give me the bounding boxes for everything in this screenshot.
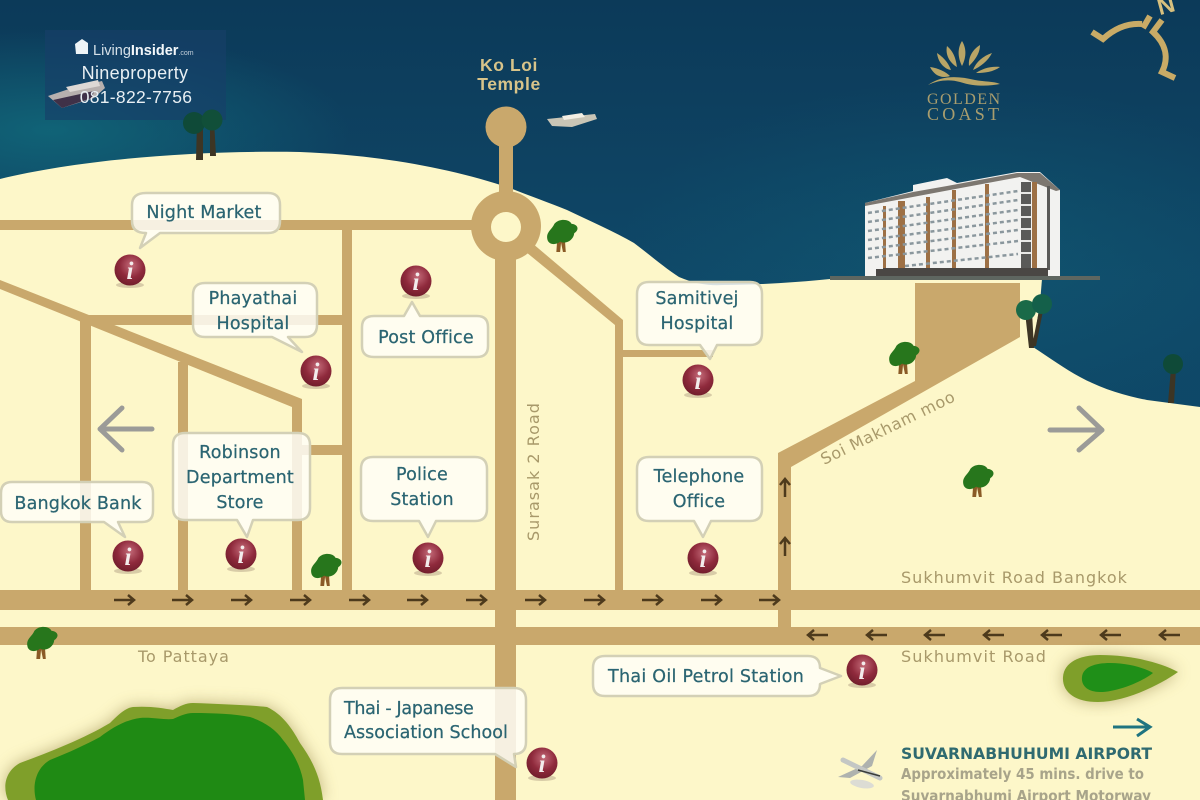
navigation arrow right: [1050, 408, 1102, 450]
callout: Robinson Department Store: Robinson: [199, 443, 281, 463]
callout: Phayathai Hospital: Phayathai: [209, 289, 297, 309]
Sukhumvit Road carriageway: [0, 627, 1200, 645]
road labels: [137, 387, 1128, 666]
golf course small: [1063, 655, 1178, 702]
callout: Night Market: Night Market: [146, 203, 262, 223]
Samitivej link road: [623, 350, 713, 357]
palm on shore: [1016, 294, 1052, 348]
icon: airplane: [838, 750, 880, 790]
callout: Telephone Office: [637, 457, 762, 537]
callout: Samitivej Hospital: Samitivej: [655, 289, 739, 309]
phone number: 081-822-7756: [80, 87, 192, 107]
tree at Sukhumvit: [311, 554, 342, 586]
compass: [1092, 0, 1178, 78]
callout: Samitivej Hospital: Hospital: [660, 314, 734, 334]
building: [830, 172, 1100, 280]
navigation arrow left: [100, 408, 152, 450]
callout: Police Station: Station: [390, 490, 454, 510]
window rows: [868, 191, 1018, 266]
LivingInsider wordmark: LivingInsider.com: [93, 43, 194, 59]
info markers: [112, 254, 878, 781]
diagonal road: [0, 280, 302, 590]
watermark panel: [45, 30, 226, 120]
logo: Golden Coast: COAST: [927, 104, 999, 124]
trees: [27, 220, 1183, 659]
icon: golden leaves: [928, 41, 1000, 86]
info: Telephone Office: [688, 542, 718, 576]
Surasak 2 Road: [495, 250, 516, 800]
label: Soi Makham moo: Soi Makham moo: [817, 387, 959, 469]
label: Surasak 2 Road: Surasak 2 Road: [524, 402, 543, 541]
label: Sukhumvit Road: Sukhumvit Road: [901, 647, 1047, 666]
Robinson link road: [301, 445, 342, 455]
Samitivej diagonal road: [526, 243, 623, 590]
callout: Phayathai Hospital: [193, 283, 317, 352]
info: Thai-Japanese School: [526, 748, 558, 781]
info: Samitivej Hospital: [682, 364, 714, 398]
parking level: [876, 268, 1048, 276]
info: Bangkok Bank: [112, 540, 144, 574]
palm east: [1163, 354, 1183, 403]
callout: Telephone Office: Telephone: [653, 467, 744, 487]
info: Night Market: [114, 254, 146, 288]
tree near Samitivej: [889, 342, 920, 374]
callout: Police Station: Police: [396, 465, 448, 485]
callout: Police Station: [361, 457, 487, 537]
callout: Bangkok Bank: [1, 482, 153, 537]
Night Market road: [0, 220, 480, 230]
agent name: Nineproperty: [82, 63, 188, 83]
callout: Thai-Japanese Association School: Thai - Japanese: [343, 699, 474, 719]
heading: Ko Loi Temple: Temple: [477, 74, 541, 94]
heading: Ko Loi Temple: Ko Loi: [480, 55, 538, 75]
airport arrow: [1113, 719, 1150, 736]
callout: Robinson Department Store: Store: [216, 493, 264, 513]
Phayathai road: [86, 315, 342, 325]
info: Robinson: [226, 538, 256, 572]
logo: Golden Coast: [927, 41, 1000, 124]
label: Sukhumvit Road Bangkok: Sukhumvit Road Bangkok: [901, 568, 1128, 587]
info: Thai Oil: [846, 654, 878, 688]
callout: Robinson Department Store: Department: [186, 468, 294, 488]
label: To Pattaya: To Pattaya: [137, 647, 230, 666]
callout: Bangkok Bank: Bangkok Bank: [14, 494, 142, 514]
callout: Telephone Office: Office: [673, 492, 725, 512]
vertical road one: [80, 320, 91, 590]
callout: Samitivej Hospital: [637, 282, 762, 359]
golf course large: [5, 703, 323, 800]
info: Phayathai Hospital: [300, 356, 332, 389]
west vertical road: [342, 230, 352, 591]
airport info: SUVARNABHUHUMI AIRPORT: [901, 744, 1152, 763]
icon: ship: [48, 80, 105, 108]
info: Post Office: [400, 266, 432, 299]
ground line: [830, 276, 1100, 280]
sea glow left: [0, 30, 350, 230]
airport info: [901, 744, 1152, 800]
road to Ko Loi Temple: [499, 140, 513, 200]
callout: Phayathai Hospital: Hospital: [216, 314, 290, 334]
Ko Loi Temple circle: [486, 106, 526, 148]
airport info: Approximately 45 mins. drive to: [901, 765, 1144, 783]
sea glow right: [620, 80, 1200, 420]
Soi Makham moo and project driveway: [778, 283, 1020, 628]
wordmark: GOLDEN: [927, 91, 1000, 108]
road arrows east: [114, 595, 779, 605]
info: Police Station: [412, 542, 444, 576]
callout: Thai-Japanese Association School: Association School: [344, 723, 508, 743]
road arrows west: [808, 630, 1180, 640]
boat near temple: [547, 113, 597, 127]
icon: palms top left: [183, 110, 222, 160]
brown columns: [883, 182, 1037, 270]
callout: Night Market: [132, 193, 280, 248]
callout: Post Office: Post Office: [378, 328, 474, 348]
callout: Robinson Department Store: [173, 433, 310, 537]
tree at To Pattaya: [27, 627, 58, 659]
callout: Thai Oil Petrol Station: Thai Oil Petrol Station: [607, 667, 804, 687]
icon: LivingInsider logo: [75, 39, 88, 54]
vertical road two: [178, 362, 188, 590]
Sukhumvit Road Bangkok carriageway: [0, 590, 1200, 610]
callout: Thai-Japanese Association School: [330, 688, 526, 767]
callout: Thai Oil Petrol Station: [593, 656, 841, 696]
road arrows north: [780, 479, 790, 556]
tree at roundabout: [547, 220, 578, 252]
tree near Soi: [963, 465, 994, 497]
roundabout: [471, 191, 541, 261]
callout: Post Office: [362, 302, 488, 357]
